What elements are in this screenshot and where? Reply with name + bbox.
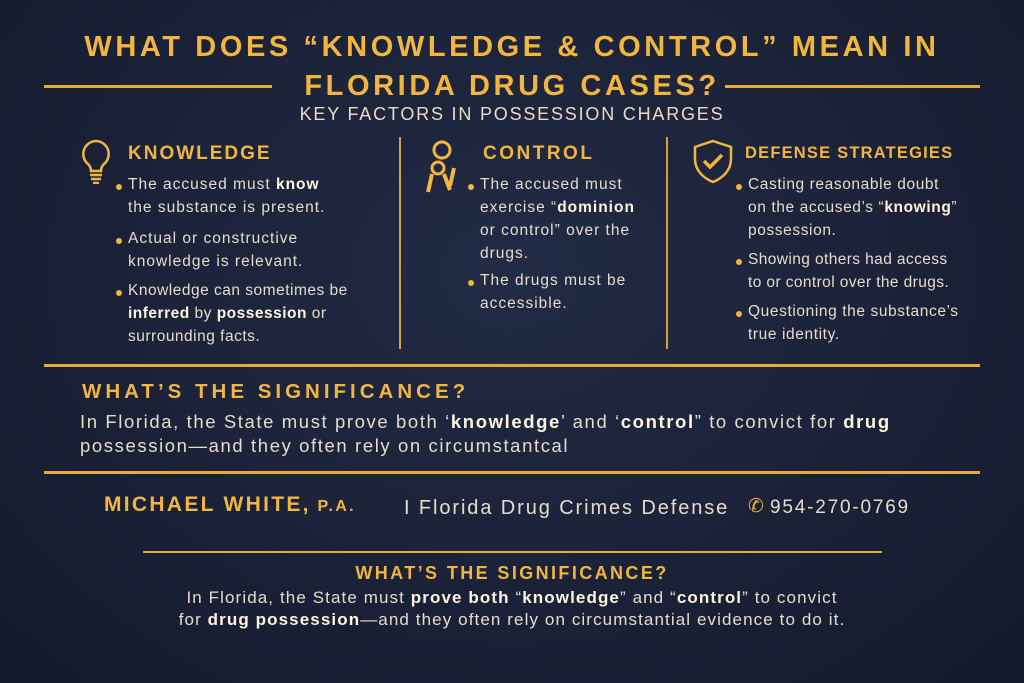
panel: control: accessible. [480, 295, 568, 312]
panel: defense strategies: true identity. [748, 326, 840, 343]
panel: control: The accused must [480, 176, 623, 193]
bullets: the substance is present. [128, 199, 325, 216]
bottom significance: In Florida, the State must prove both “knowledge” and “control” to convict [186, 588, 838, 607]
panel: defense strategies: Questioning the substance’s [748, 303, 959, 320]
bottom significance: for drug possession—and they often rely on circumstantial evidence to do it. [179, 610, 845, 629]
panel: control: The drugs must be [480, 272, 626, 289]
title [84, 31, 940, 102]
panel: knowledge: Actual or constructive [128, 230, 298, 247]
panel: knowledge: knowledge is relevant. [128, 253, 303, 270]
significance section [80, 380, 891, 456]
significance section: possession—and they often rely on circumstantcal [80, 435, 569, 456]
footer contact: I Florida Drug Crimes Defense [404, 497, 729, 519]
panel: control: drugs. [480, 245, 529, 262]
panel: knowledge: surrounding facts. [128, 328, 260, 345]
panel: defense strategies: Showing others had access [748, 251, 948, 268]
panel: defense strategies: to or control over the drugs. [748, 274, 949, 291]
panel: knowledge: inferred by possession or [128, 305, 327, 322]
panel: defense strategies: possession. [748, 222, 836, 239]
icon: keys [426, 140, 456, 192]
bullets [128, 176, 325, 216]
bullets: The accused must know [128, 176, 320, 193]
heading: CONTROL [483, 143, 594, 164]
footer contact [104, 493, 910, 519]
panel: knowledge [82, 140, 348, 345]
significance section: In Florida, the State must prove both ‘knowledge’ and ‘control” to convict for drug [80, 411, 891, 432]
panel: control: exercise “dominion [480, 199, 635, 216]
panel: defense strategies: on the accused’s “knowing” [748, 199, 957, 216]
title: WHAT DOES “KNOWLEDGE & CONTROL” MEAN IN [84, 31, 940, 63]
panel: knowledge: Knowledge can sometimes be [128, 282, 348, 299]
icon: lightbulb [82, 140, 110, 184]
icon: phone: ✆ [748, 496, 764, 517]
title: FLORIDA DRUG CASES? [304, 70, 720, 102]
panel: control: or control” over the [480, 222, 630, 239]
panel: defense strategies: Casting reasonable doubt [748, 176, 939, 193]
footer contact: MICHAEL WHITE, P.A. [104, 493, 356, 516]
heading: KNOWLEDGE [128, 143, 272, 164]
significance section: WHAT’S THE SIGNIFICANCE? [82, 380, 469, 403]
footer contact: 954-270-0769 [770, 497, 910, 518]
heading: DEFENSE STRATEGIES [745, 144, 953, 162]
panel: defense strategies [694, 140, 959, 343]
subtitle: KEY FACTORS IN POSSESSION CHARGES [300, 104, 724, 124]
panel: control [426, 140, 635, 312]
bottom significance [179, 563, 845, 629]
icon: shield [694, 140, 732, 184]
bottom significance: WHAT’S THE SIGNIFICANCE? [355, 563, 669, 583]
